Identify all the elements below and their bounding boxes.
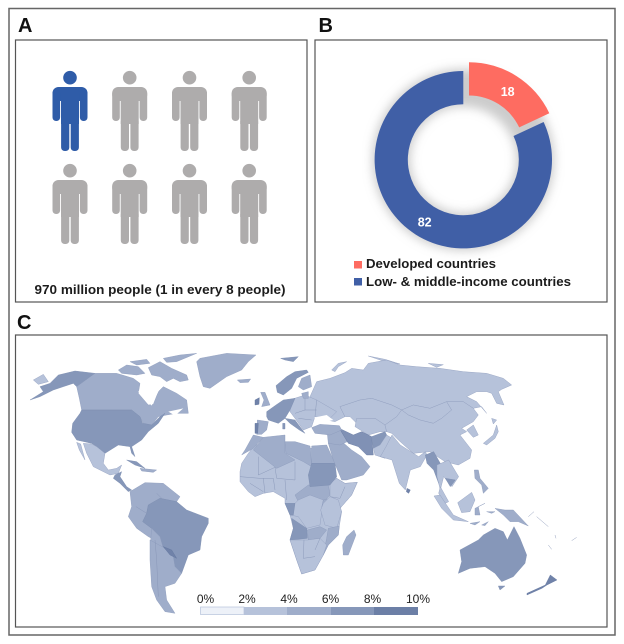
- heading C: C: [17, 312, 31, 334]
- panel A: people: [16, 15, 307, 302]
- legend labels: 0%: [197, 592, 215, 606]
- panel C border: [16, 335, 607, 627]
- donut shadow: [391, 88, 535, 232]
- map: North Africa and Middle East: [242, 430, 370, 487]
- value 18: 18: [501, 85, 515, 99]
- panel A border: [16, 40, 307, 302]
- panel B border: [315, 40, 607, 302]
- legend labels: 2%: [238, 592, 256, 606]
- icons: grey people: [52, 71, 267, 244]
- map: Russia and Central Asia: [310, 356, 512, 465]
- value 82: 82: [418, 216, 432, 230]
- map: Europe: [255, 357, 342, 435]
- world map countries: [30, 353, 577, 613]
- legend: developed: Developed countries: [366, 257, 496, 271]
- legend labels: 4%: [280, 592, 298, 606]
- map legend: [197, 592, 430, 615]
- map: Oceania: [434, 470, 577, 590]
- heading A: A: [18, 15, 32, 37]
- legend: low and middle income: Low- & middle-income countries: [366, 275, 571, 289]
- icon: highlighted person: [52, 71, 88, 151]
- legend labels: 8%: [364, 592, 382, 606]
- panel C: world map: [16, 312, 607, 627]
- legend color bar: [200, 607, 418, 615]
- map: South and Southeast Asia: [380, 435, 557, 595]
- map: North America: [30, 353, 197, 475]
- panel B: donut chart: [315, 15, 607, 302]
- legend labels: [197, 592, 430, 606]
- legend labels: 6%: [322, 592, 340, 606]
- legend labels: 10%: [406, 592, 430, 606]
- donut segment: developed: [469, 62, 549, 127]
- caption A: 970 million people (1 in every 8 people): [34, 283, 286, 297]
- map: South America and Greenland: [113, 353, 256, 613]
- map: Africa: [240, 443, 357, 574]
- donut segment: low and middle income: [375, 71, 552, 248]
- heading B: B: [318, 15, 333, 37]
